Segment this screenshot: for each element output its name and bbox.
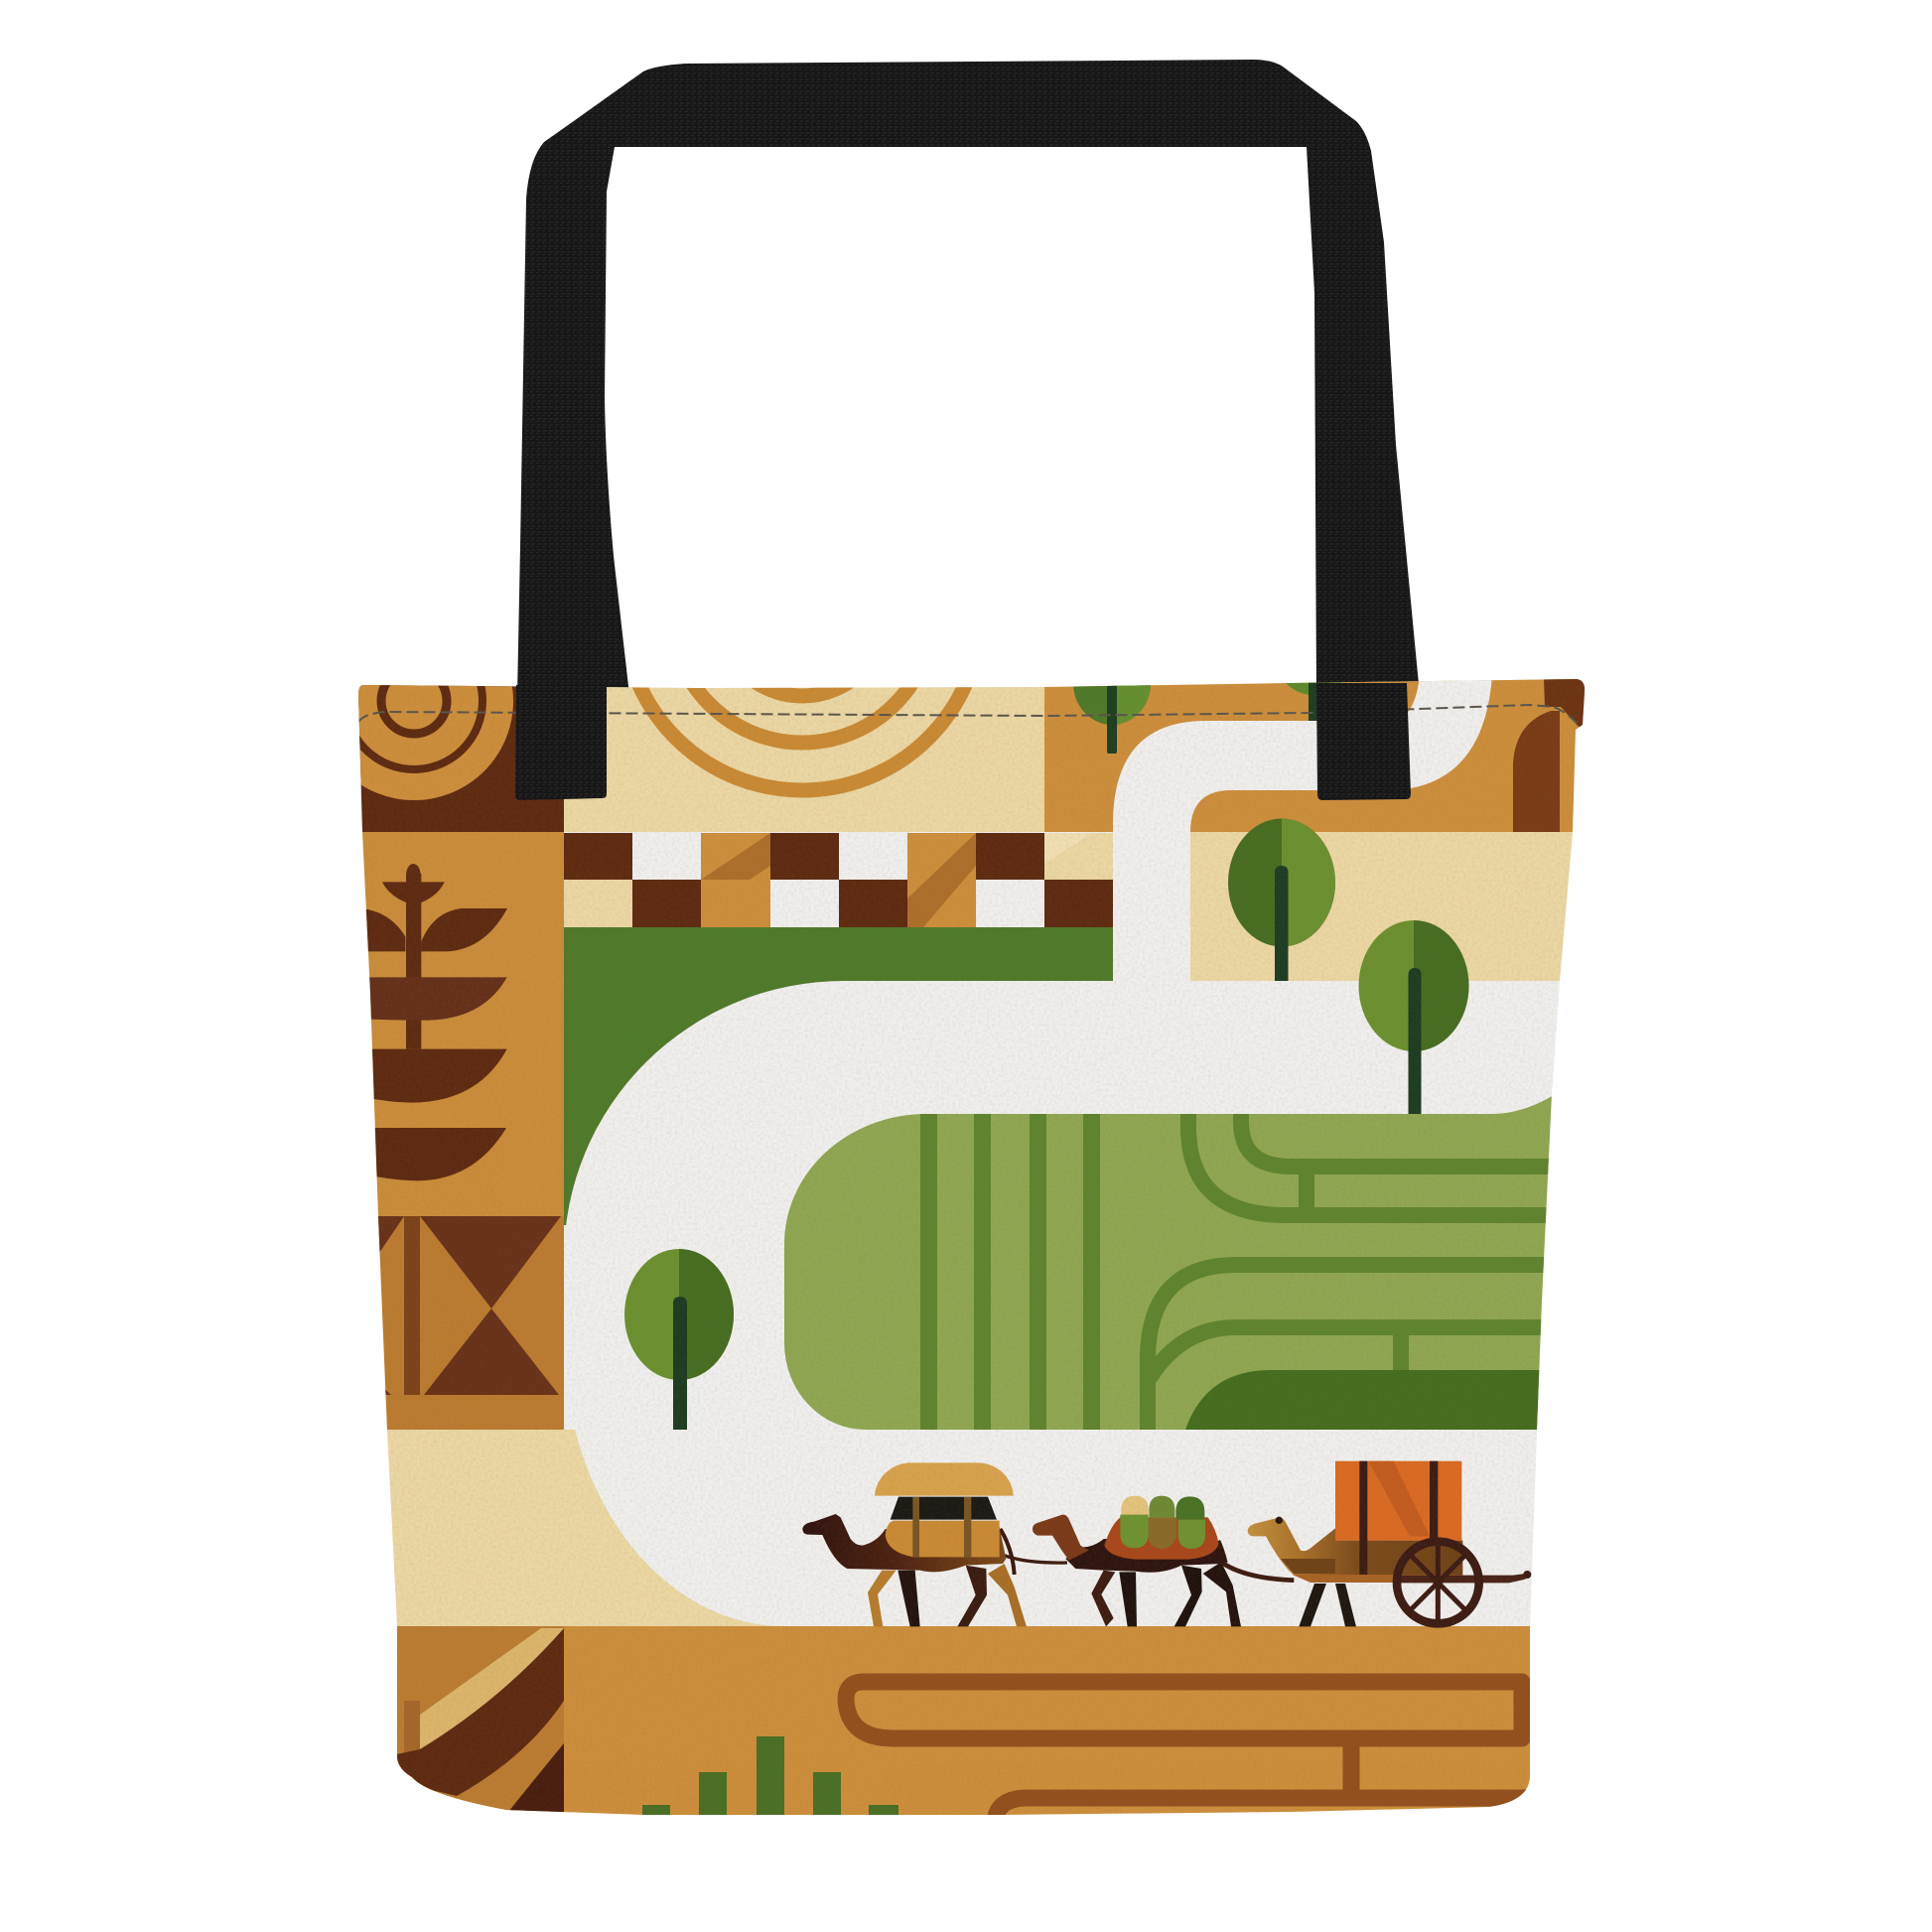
panel: top arcs on cream [564,687,1044,832]
base fabric [564,681,1419,1430]
panel: right cream block [1190,832,1607,981]
icon: cart wheel [1397,1542,1479,1623]
icon: tree on white road [624,1249,734,1430]
dark green field [1185,1370,1559,1430]
camel one with canopy [802,1462,1067,1626]
fabric texture [338,665,1608,1827]
white road [566,680,1491,1626]
tote bag product illustration [358,60,1585,1815]
bar chart motif [642,1736,898,1825]
brown rounded line pattern [846,1682,1549,1822]
icon: brown arch [1513,711,1560,832]
panel: plant column [347,832,564,1216]
strap: right front end [1316,683,1411,800]
panel: green block [564,927,1113,1225]
icon: small tree behind strap [1286,682,1342,721]
panel: light green field [784,1092,1569,1430]
vertical stripes [920,1114,1100,1430]
strap: rear loop [515,60,1420,798]
icon: plant motif [359,864,507,1180]
folded brown corner [1544,679,1585,727]
panel: top-right tan block with trees [1044,679,1585,832]
curved field lines [1148,1114,1569,1430]
panel: triangle block [378,1216,564,1430]
panel: top-left concentric circle block [358,685,564,832]
camel caravan [802,1461,1531,1626]
camel three pulling cart [1248,1461,1531,1626]
panel: cream lower-left block [387,1430,782,1626]
icon: small tree left [1073,685,1151,754]
icon: tree on cream right [1358,920,1469,1114]
strap: left front end [515,685,607,800]
bag body [358,679,1585,1815]
icon: tree on cream left [1228,818,1335,981]
panel: checker band [564,833,1113,927]
panel: bottom-left diagonal block [377,1626,564,1825]
stitch line [358,705,1581,728]
camel two with loads [1033,1496,1294,1626]
panel: bottom tan band [347,1626,1618,1825]
